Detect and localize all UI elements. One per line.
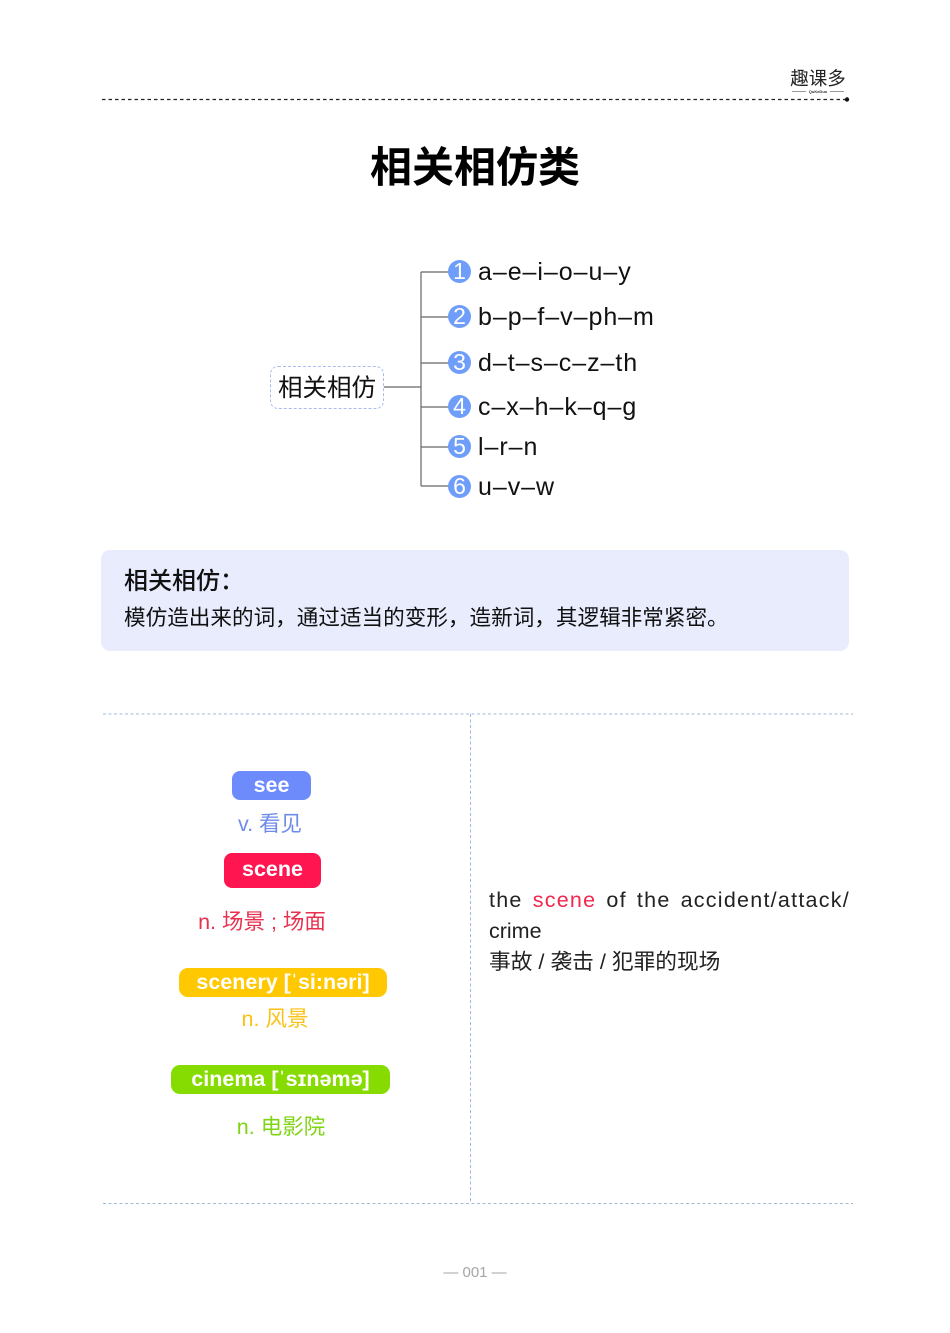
branch 5: l–r–n xyxy=(478,433,538,461)
tree connectors xyxy=(384,271,448,487)
meaning: see: v. 看见 xyxy=(238,812,302,836)
number 3 xyxy=(448,351,471,374)
meaning: scene: n. 场景 ; 场面 xyxy=(198,910,326,934)
word: scene: scene xyxy=(242,857,303,881)
word: scenery: scenery [ˈsi:nəri] xyxy=(196,970,370,994)
header logo: 趣课多 xyxy=(790,68,846,89)
branch 2: b–p–f–v–ph–m xyxy=(478,303,655,331)
number 2: 2 xyxy=(453,303,466,329)
example line 1: the xyxy=(637,888,671,912)
example line 1: of xyxy=(606,888,627,912)
example line 1: scene xyxy=(533,888,596,912)
word: scenery xyxy=(179,968,387,997)
number 2 xyxy=(448,305,471,328)
number 4 xyxy=(448,395,471,418)
number 4: 4 xyxy=(453,393,466,419)
table frame xyxy=(103,714,853,1204)
root node xyxy=(270,366,384,409)
branch 1: a–e–i–o–u–y xyxy=(478,258,632,286)
example line 2: crime xyxy=(489,918,542,942)
number 1 xyxy=(448,260,471,283)
title: 相关相仿类 xyxy=(370,144,580,191)
number 6 xyxy=(448,475,471,498)
panel text: 模仿造出来的词，通过适当的变形，造新词，其逻辑非常紧密。 xyxy=(124,605,729,630)
number 3: 3 xyxy=(453,349,466,375)
word: see: see xyxy=(254,773,289,797)
example line 1 xyxy=(489,888,850,912)
page number: — 001 — xyxy=(443,1264,507,1281)
root node: 相关相仿 xyxy=(278,375,376,402)
meaning: scenery: n. 风景 xyxy=(242,1007,308,1031)
branch 6: u–v–w xyxy=(478,473,555,501)
number 6: 6 xyxy=(453,473,466,499)
meaning: cinema: n. 电影院 xyxy=(237,1115,325,1139)
number 5 xyxy=(448,435,471,458)
word: cinema xyxy=(171,1065,390,1094)
panel heading: 相关相仿： xyxy=(124,568,244,595)
word: scene xyxy=(224,853,321,888)
example translation: 事故 / 袭击 / 犯罪的现场 xyxy=(489,949,720,974)
word: see xyxy=(232,771,311,800)
branch 3: d–t–s–c–z–th xyxy=(478,349,638,377)
example sentence xyxy=(489,888,850,974)
example line 1: the xyxy=(489,888,523,912)
word: cinema: cinema [ˈsɪnəmə] xyxy=(191,1067,370,1091)
number 1: 1 xyxy=(453,258,466,284)
tree diagram xyxy=(270,271,448,487)
number 5: 5 xyxy=(453,433,466,459)
definition panel xyxy=(101,550,849,651)
header dashed rule xyxy=(102,97,850,102)
branch 4: c–x–h–k–q–g xyxy=(478,393,637,421)
header logo: QuKeDuo xyxy=(809,89,827,94)
example line 1: accident/attack/ xyxy=(681,888,850,912)
